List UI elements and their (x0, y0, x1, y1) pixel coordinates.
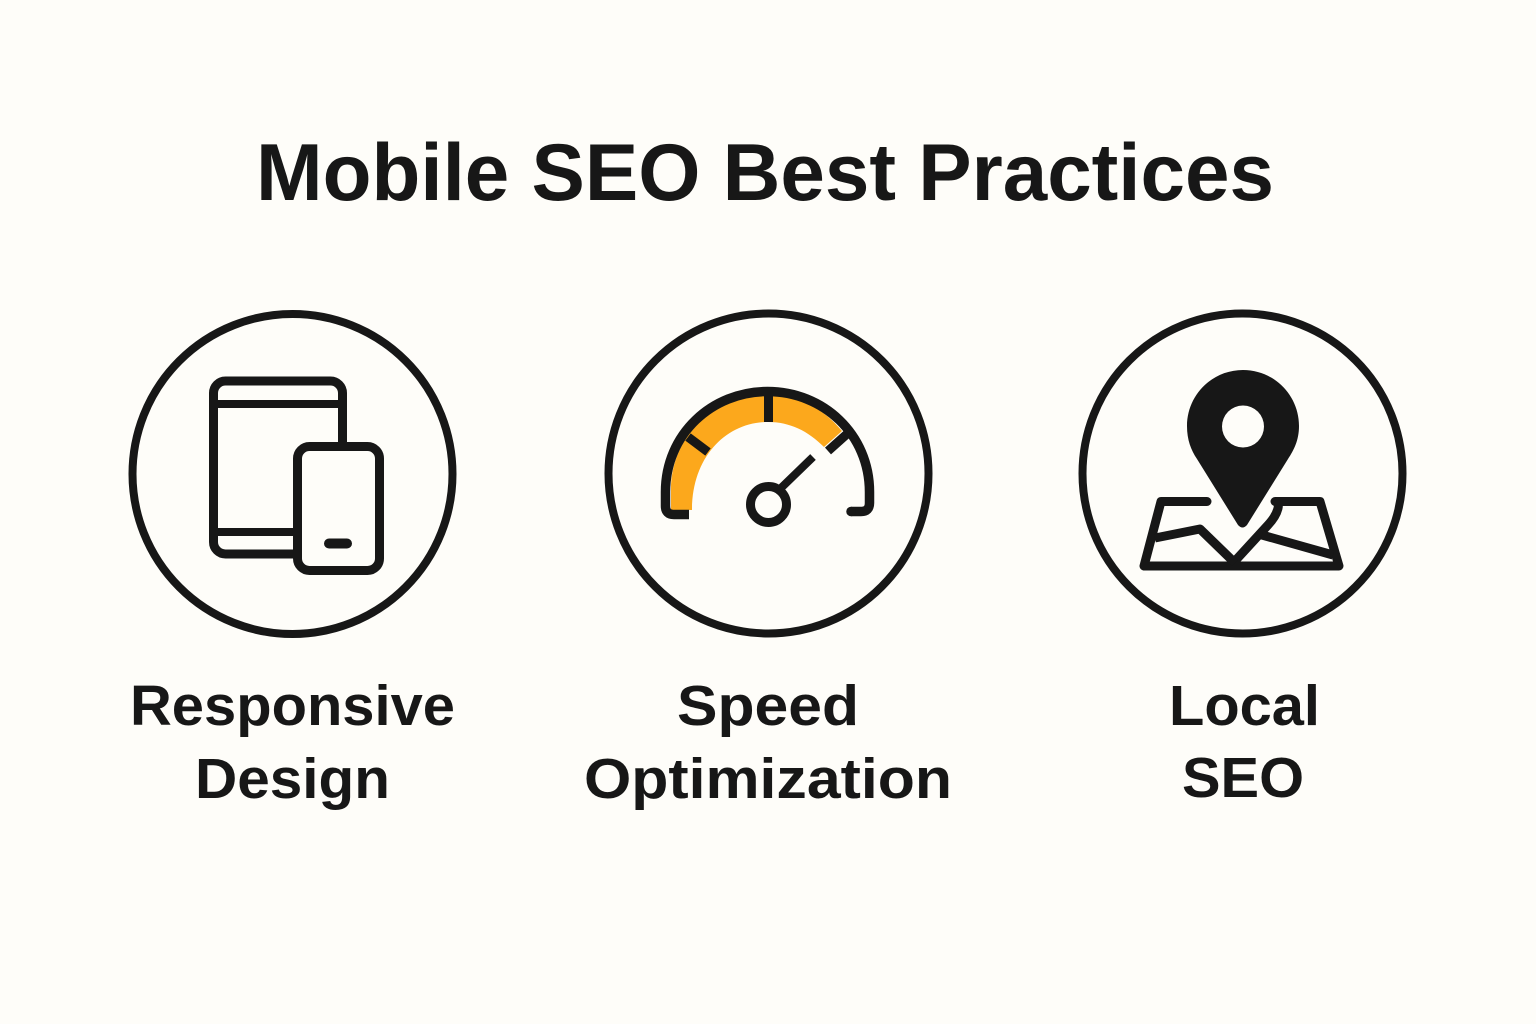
label: responsive design (130, 674, 455, 811)
label: speed optimization (584, 674, 952, 811)
label: speed optimization: Speed (677, 674, 859, 738)
label: speed optimization: Optimization (584, 747, 952, 811)
label: responsive design: Design (195, 747, 390, 811)
label: responsive design: Responsive (130, 674, 455, 738)
icon circle: local seo (1082, 314, 1402, 634)
label: local seo: SEO (1182, 746, 1304, 810)
title: Mobile SEO Best Practices (256, 128, 1274, 218)
icon: map with location pin (1144, 370, 1339, 566)
panel: speed optimization (584, 314, 952, 811)
icon: speedometer gauge (666, 392, 870, 522)
panel: local seo (1082, 314, 1402, 810)
panel: responsive design (130, 314, 455, 811)
label: local seo: Local (1169, 674, 1320, 738)
icon circle: responsive design (132, 314, 452, 634)
icon: tablet and phone (214, 381, 380, 570)
label: local seo (1169, 674, 1320, 810)
icon circle: speed optimization (608, 314, 928, 634)
